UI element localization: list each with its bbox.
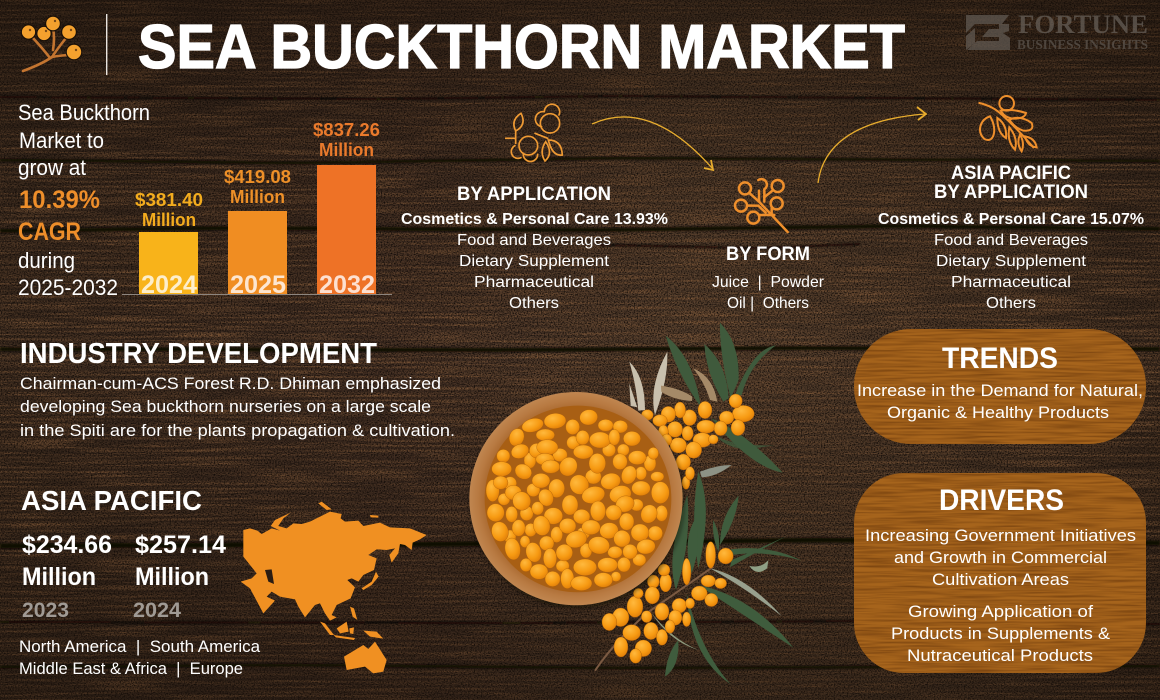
bar: 2025: 2025 xyxy=(230,271,286,299)
text block: CAGR statement xyxy=(18,100,150,300)
map: Asia Pacific xyxy=(241,502,427,673)
bar: 2025 xyxy=(224,167,291,299)
text block: CAGR statement: 2025-2032 xyxy=(18,275,118,300)
panel: drivers: Products in Supplements & xyxy=(891,624,1111,643)
berries: in bowl xyxy=(486,408,669,591)
logo: Fortune Business Insights: FORTUNE xyxy=(1018,10,1148,39)
arrow: application to form xyxy=(592,117,713,170)
text block: Asia Pacific market values: Million xyxy=(22,563,96,591)
text block: CAGR statement: Sea Buckthorn xyxy=(18,100,150,125)
text block: Asia Pacific market values xyxy=(19,485,261,678)
text block: by application: BY APPLICATION xyxy=(457,184,611,205)
bar chart: market size xyxy=(122,120,392,299)
text block: Asia Pacific by application: Pharmaceutical xyxy=(951,274,1071,291)
text block: Asia Pacific by application: Cosmetics & Personal Care 15.07% xyxy=(878,211,1144,228)
text block: Asia Pacific market values: ASIA PACIFIC xyxy=(21,485,202,516)
photo: bowl of sea buckthorn berries with branches xyxy=(469,323,802,684)
text block: Asia Pacific market values: 2023 xyxy=(22,599,69,622)
text block: Asia Pacific market values: Million xyxy=(135,563,209,591)
panel: trends: Organic & Healthy Products xyxy=(887,403,1109,422)
panel: drivers xyxy=(854,473,1146,673)
text block: by application xyxy=(401,184,668,312)
text block: CAGR statement: CAGR xyxy=(18,218,81,246)
text block: industry development: in the Spiti are for the plants propagation & cultivation. xyxy=(20,421,455,440)
icon: sea buckthorn branch logo xyxy=(21,16,82,71)
bar: 2024: $381.40 xyxy=(135,190,203,210)
berries: on branches xyxy=(602,394,754,663)
text block: by application: Food and Beverages xyxy=(457,232,611,249)
panel: trends: Increase in the Demand for Natural, xyxy=(857,381,1143,400)
panel: trends xyxy=(854,329,1146,444)
bar: 2025: $419.08 xyxy=(224,167,291,187)
text block: industry development: Chairman-cum-ACS Forest R.D. Dhiman emphasized xyxy=(20,374,441,393)
bar: 2024 xyxy=(135,190,203,299)
icon: branch with round berries xyxy=(735,179,788,232)
logo: Fortune Business Insights xyxy=(966,10,1148,52)
text block: CAGR statement: 10.39% xyxy=(19,186,100,214)
text block: by application: Dietary Supplement xyxy=(459,253,610,270)
text block: by form: Juice | Powder xyxy=(712,274,825,291)
text block: by form: BY FORM xyxy=(726,244,810,265)
bar: 2032: 2032 xyxy=(319,271,375,299)
text block: Asia Pacific by application: Food and Beverages xyxy=(934,232,1088,249)
bar: 2032: $837.26 xyxy=(313,120,380,140)
bar: 2024: Million xyxy=(142,210,196,230)
text block: Asia Pacific by application: Others xyxy=(986,295,1036,312)
bar: 2024: 2024 xyxy=(141,271,197,299)
panel: drivers: Increasing Government Initiatives xyxy=(865,526,1136,545)
text block: Asia Pacific market values: $234.66 xyxy=(22,531,112,559)
text block: CAGR statement: grow at xyxy=(18,155,86,180)
text block: Asia Pacific by application: Dietary Supplement xyxy=(936,253,1087,270)
text block: by application: Pharmaceutical xyxy=(474,274,594,291)
bowl: wooden xyxy=(469,392,685,609)
text block: Asia Pacific by application: BY APPLICATION xyxy=(934,182,1088,203)
text block: Asia Pacific market values: North America | South America xyxy=(19,638,261,656)
panel: drivers: Cultivation Areas xyxy=(932,570,1069,589)
text block: Asia Pacific market values: 2024 xyxy=(133,599,181,622)
text block: Asia Pacific market values: $257.14 xyxy=(135,531,226,559)
text block: Asia Pacific market values: Middle East & Africa | Europe xyxy=(19,660,243,678)
logo: Fortune Business Insights: BUSINESS INSIGHTS xyxy=(1017,37,1148,52)
icon: olive-shaped berry branch xyxy=(979,96,1037,151)
panel: drivers: Growing Application of xyxy=(908,602,1093,621)
text block: CAGR statement: during xyxy=(18,248,75,273)
leaves: upper and lower sprigs xyxy=(595,323,802,684)
text block: Asia Pacific by application xyxy=(878,163,1144,312)
bar: 2025: Million xyxy=(230,187,285,207)
panel: trends: TRENDS xyxy=(942,342,1058,375)
bar: 2032: Million xyxy=(319,140,374,160)
text block: by form xyxy=(712,244,825,312)
arrow: form to Asia Pacific xyxy=(818,107,926,183)
text block: CAGR statement: Market to xyxy=(19,128,104,153)
panel: drivers: DRIVERS xyxy=(939,484,1064,517)
text block: industry development: INDUSTRY DEVELOPMENT xyxy=(20,338,377,370)
header divider xyxy=(106,14,107,75)
icon: berries and leaves xyxy=(506,104,562,161)
panel: drivers: Nutraceutical Products xyxy=(907,646,1093,665)
text block: by form: Oil | Others xyxy=(727,295,809,312)
text block: Asia Pacific by application: ASIA PACIFIC xyxy=(951,163,1071,184)
bar: 2032 xyxy=(313,120,380,299)
panel: drivers: and Growth in Commercial xyxy=(894,548,1107,567)
text block: industry development: developing Sea buckthorn nurseries on a large scale xyxy=(20,397,431,416)
title: SEA BUCKTHORN MARKET xyxy=(138,13,905,82)
text block: industry development xyxy=(20,338,455,440)
text block: by application: Others xyxy=(509,295,559,312)
text block: by application: Cosmetics & Personal Care 13.93% xyxy=(401,211,668,228)
